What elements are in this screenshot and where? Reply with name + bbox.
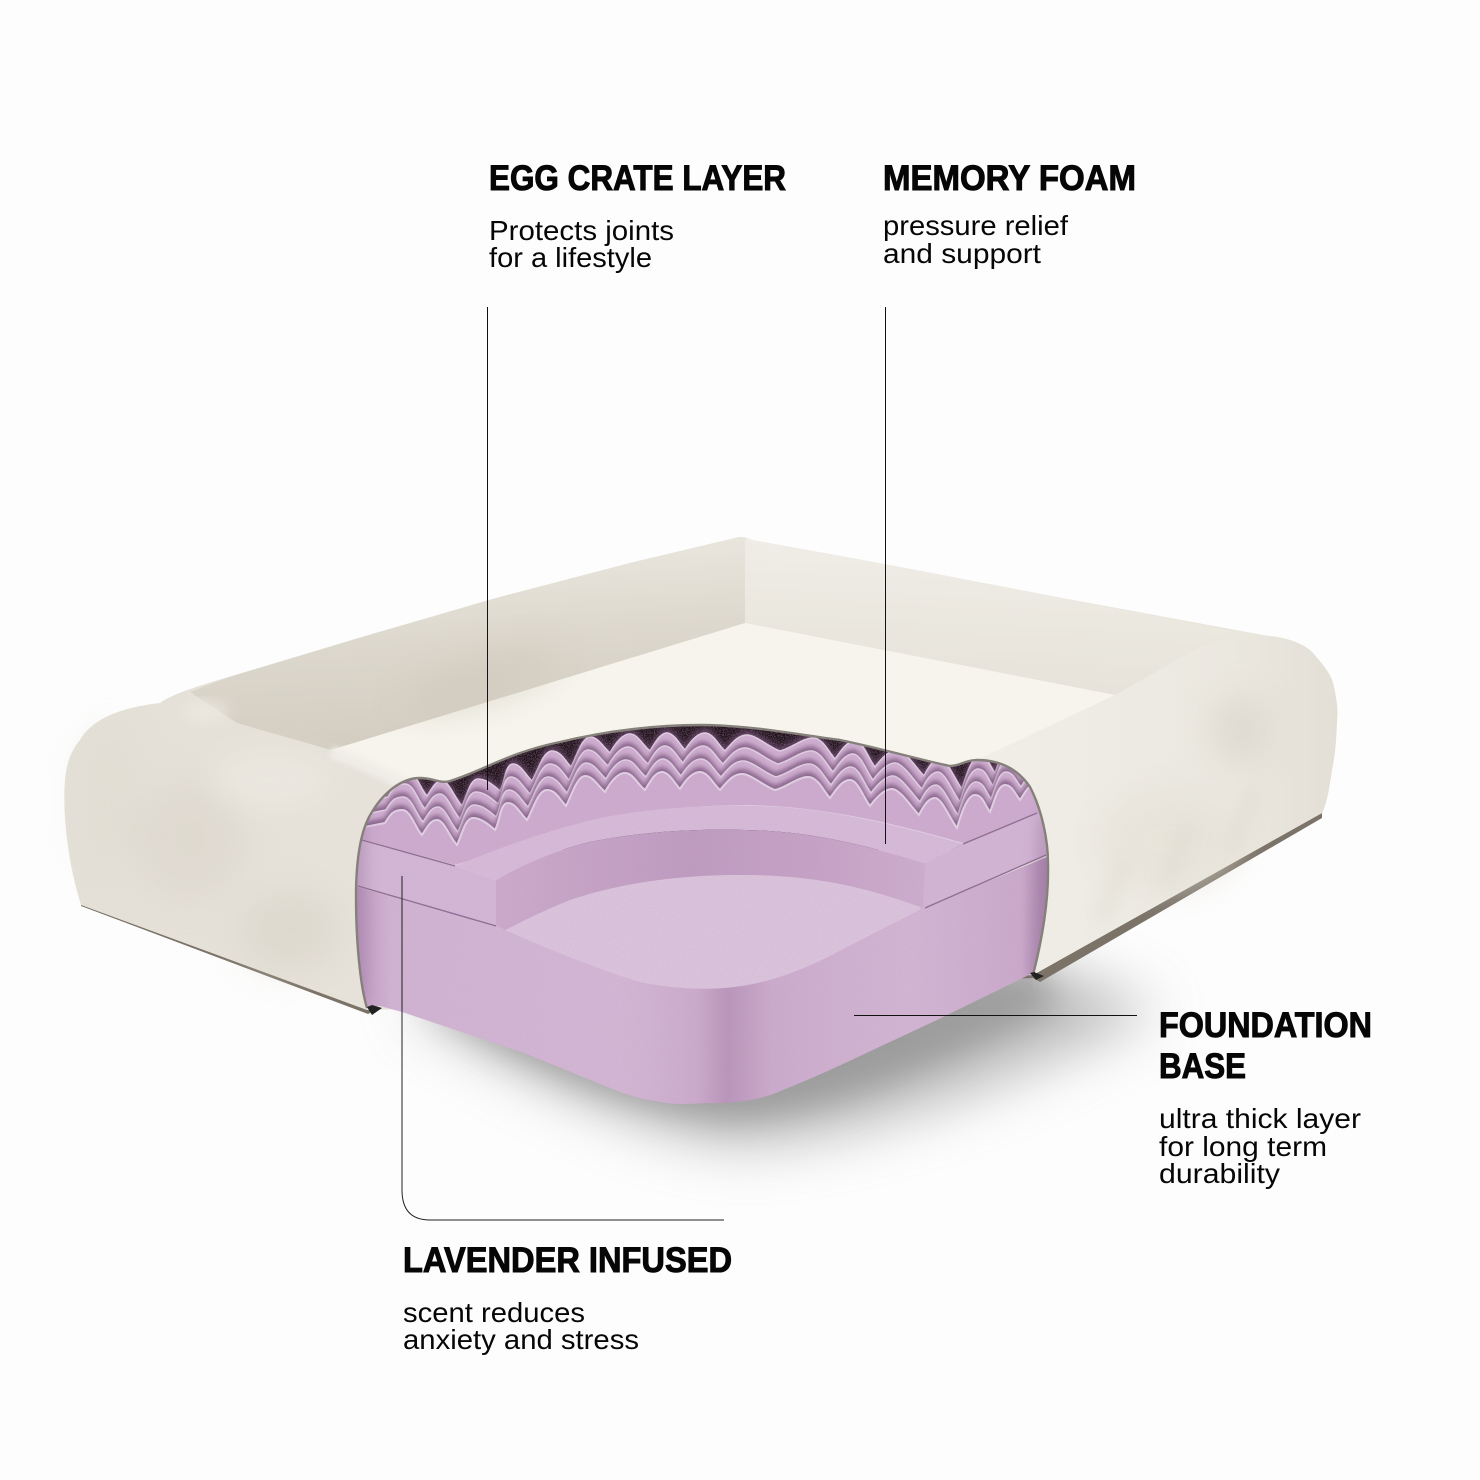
heading: LAVENDER INFUSED: [403, 1241, 732, 1280]
egg crate and side faces: [357, 726, 1047, 995]
description: scent reduces: [403, 1297, 585, 1328]
fabric folds on right cushion: [1100, 790, 1255, 920]
back left bolster: [190, 538, 750, 750]
description: [403, 1297, 639, 1355]
memory foam side faces: [357, 840, 496, 894]
callout: egg crate layer: [489, 159, 786, 273]
memory foam top surface: [455, 806, 963, 880]
heading: MEMORY FOAM: [883, 159, 1136, 198]
description: [1159, 1103, 1361, 1189]
callout: memory foam: [883, 159, 1136, 269]
leader line: memory foam: [884, 307, 886, 844]
cover silhouette: [64, 537, 1337, 1010]
leader line: foundation: [854, 1014, 1137, 1016]
description: [489, 215, 674, 273]
description: anxiety and stress: [403, 1324, 639, 1355]
foundation top surface: [505, 875, 923, 989]
layer seams: [358, 813, 1046, 926]
heading: BASE: [1159, 1047, 1246, 1086]
callout: lavender infused: [403, 1241, 732, 1355]
egg crate back rows: [351, 733, 1060, 853]
dog bed cover: [64, 537, 1337, 1014]
foundation base layer: [357, 726, 1047, 1104]
cover cut edge: [356, 725, 1048, 1008]
heading: EGG CRATE LAYER: [489, 159, 786, 198]
leader line: lavender: [402, 876, 724, 1220]
description: for a lifestyle: [489, 242, 652, 273]
back right bolster: [745, 538, 1280, 695]
egg crate front row: [350, 772, 1055, 866]
foundation front face: [356, 857, 1047, 1104]
floor shadow: [400, 960, 1160, 1145]
back corner seam: [740, 542, 748, 622]
description: ultra thick layer: [1159, 1103, 1361, 1134]
foam layers cutaway: [357, 726, 1047, 1104]
dark cavity behind egg crate: [418, 726, 998, 850]
callout: foundation base: [1159, 1006, 1372, 1189]
side shade at cover edges: [356, 815, 1048, 1000]
description: pressure relief: [883, 210, 1068, 241]
right cushion: [977, 636, 1337, 975]
cloth mottling: [80, 636, 1270, 970]
description: for long term: [1159, 1131, 1327, 1162]
cover bottom edge: [81, 812, 1322, 1014]
memory foam inner curved face: [496, 830, 925, 930]
description: and support: [883, 238, 1041, 269]
leader line: egg crate: [486, 307, 488, 790]
description: durability: [1159, 1158, 1280, 1189]
heading: [1159, 1006, 1372, 1086]
description: Protects joints: [489, 215, 674, 246]
description: [883, 210, 1068, 269]
cover corner tips: [367, 972, 1044, 1015]
soft blend at platform edge: [331, 752, 425, 795]
heading: FOUNDATION: [1159, 1006, 1372, 1045]
sleeping platform: [331, 623, 1115, 800]
soft blend at left cushion top: [181, 702, 229, 722]
